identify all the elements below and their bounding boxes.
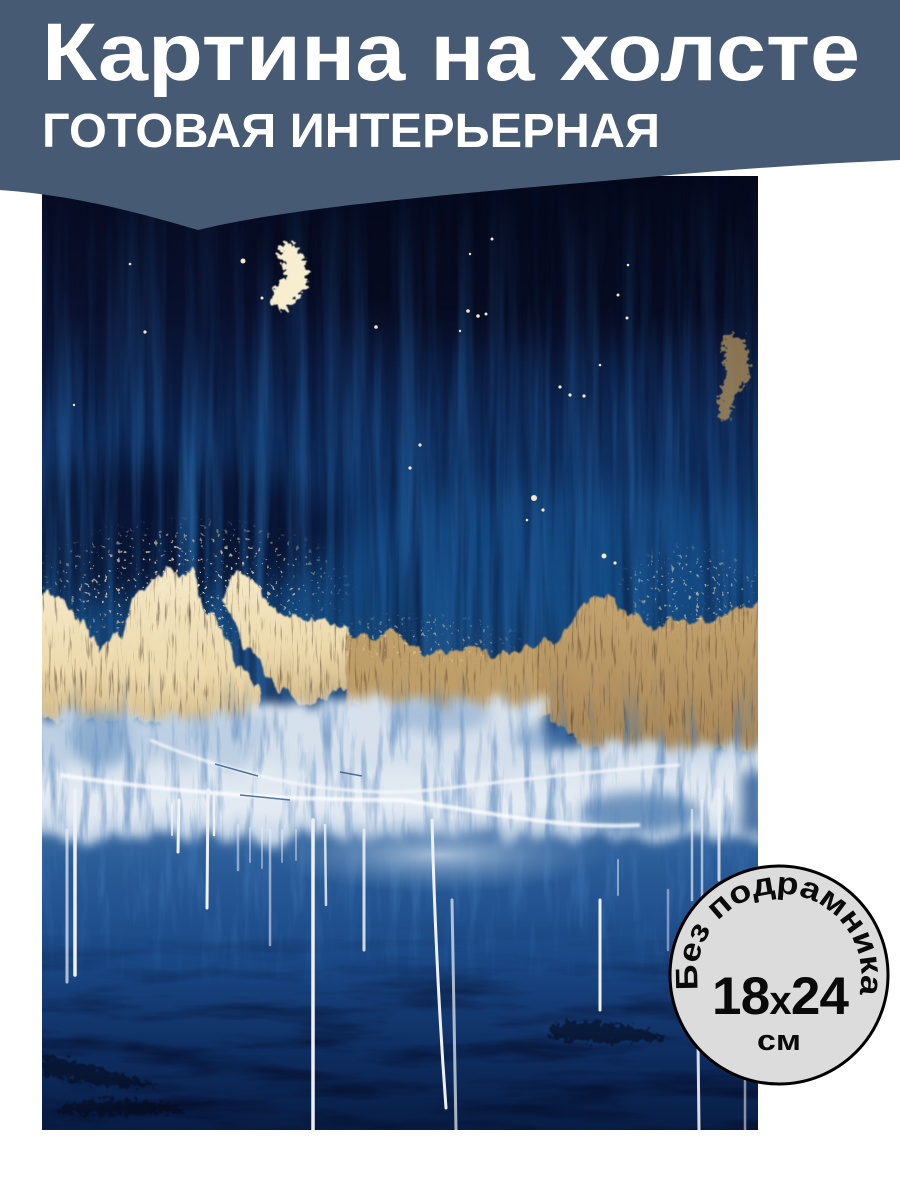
painting: abstract night canvas [42, 176, 758, 1130]
lower water strokes [42, 920, 758, 1130]
white impasto band [42, 676, 758, 950]
gold paint band [42, 517, 758, 757]
badge size number: 18x24 [712, 967, 850, 1026]
header banner [0, 0, 900, 230]
title: Картина на холсте [42, 7, 860, 98]
moon and gold speckles [73, 238, 750, 565]
subtitle: ГОТОВАЯ ИНТЕРЬЕРНАЯ [42, 105, 660, 158]
size badge [668, 864, 890, 1086]
badge arc text: Без подрамника [676, 876, 878, 995]
dark lower edge marks [42, 1022, 670, 1115]
white paint drips [67, 790, 745, 1130]
badge unit: см [757, 1025, 801, 1057]
